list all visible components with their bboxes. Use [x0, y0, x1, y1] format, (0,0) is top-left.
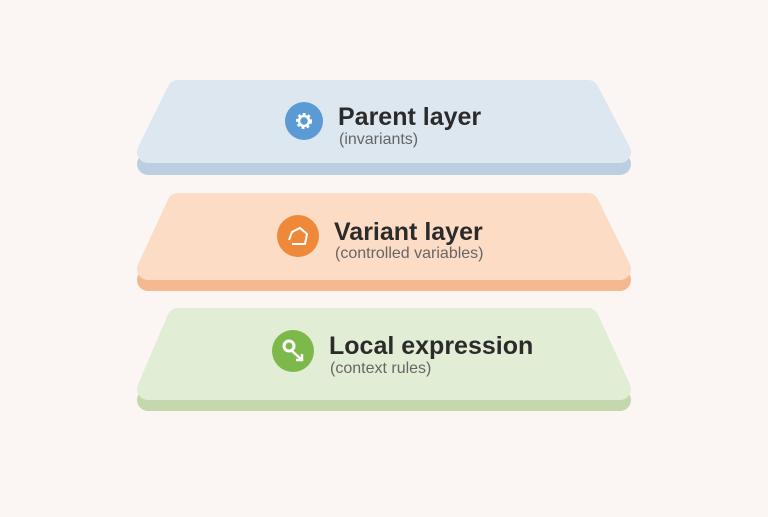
text: controlled variables: (controlled variables) [335, 245, 484, 262]
heading: Local expression: Local expression [329, 332, 533, 360]
text: context rules: (context rules) [330, 360, 431, 377]
icon: location arrow [272, 330, 314, 372]
icon: gear [285, 102, 323, 140]
heading: Parent layer: Parent layer [338, 103, 481, 131]
panel: variant layer [148, 204, 620, 280]
heading: Variant layer: Variant layer [334, 218, 483, 246]
icon: variant [277, 215, 319, 257]
panel: local expression [148, 319, 620, 400]
text: invariants: (invariants) [339, 131, 418, 148]
panel: parent layer [148, 91, 620, 164]
